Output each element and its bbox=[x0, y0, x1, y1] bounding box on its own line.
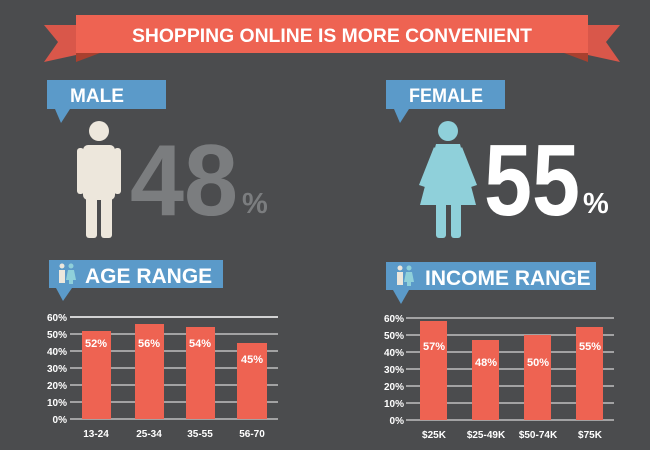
chart: age range: 25-34 bbox=[136, 429, 162, 440]
chart: income range: 30% bbox=[384, 365, 404, 376]
chart: income range: 50% bbox=[527, 357, 549, 369]
chart: income range: 57% bbox=[423, 341, 445, 353]
chart: income range: 40% bbox=[384, 348, 404, 359]
chart: income range: 50% bbox=[384, 331, 404, 342]
male percentage: 48 bbox=[130, 125, 238, 237]
chart: income range: 60% bbox=[384, 314, 404, 325]
title banner bbox=[44, 15, 620, 62]
chart: income range: 20% bbox=[384, 382, 404, 393]
female percentage: 55 bbox=[484, 125, 580, 237]
chart: income range: 48% bbox=[475, 357, 497, 369]
label: female: FEMALE bbox=[409, 86, 483, 107]
male percentage: % bbox=[242, 188, 268, 220]
label: income range bbox=[386, 262, 596, 304]
chart: age range: 0% bbox=[53, 415, 67, 426]
chart: age range: 40% bbox=[47, 347, 67, 358]
chart: age range bbox=[47, 313, 278, 440]
chart: age range: 52% bbox=[85, 338, 107, 350]
label: female bbox=[386, 80, 505, 123]
chart: income range: $50-74K bbox=[519, 430, 558, 441]
label: income range: INCOME RANGE bbox=[425, 267, 591, 290]
label: male: MALE bbox=[70, 86, 124, 107]
label: male bbox=[47, 80, 166, 123]
icon: female figure bbox=[419, 121, 477, 238]
chart: age range: 54% bbox=[189, 338, 211, 350]
title banner: SHOPPING ONLINE IS MORE CONVENIENT bbox=[132, 26, 532, 47]
chart: age range: 35-55 bbox=[187, 429, 213, 440]
chart: age range: 30% bbox=[47, 364, 67, 375]
chart: age range: 20% bbox=[47, 381, 67, 392]
chart: income range: $75K bbox=[578, 430, 603, 441]
chart: age range: 45% bbox=[241, 354, 263, 366]
female percentage: % bbox=[583, 188, 609, 220]
chart: age range: 56-70 bbox=[239, 429, 265, 440]
label: age range: AGE RANGE bbox=[85, 265, 212, 288]
chart: age range: 10% bbox=[47, 398, 67, 409]
chart: income range: 10% bbox=[384, 399, 404, 410]
chart: age range: 60% bbox=[47, 313, 67, 324]
chart: income range: 0% bbox=[390, 416, 404, 427]
chart: income range: $25-49K bbox=[467, 430, 506, 441]
chart: age range: 13-24 bbox=[83, 429, 109, 440]
chart: income range bbox=[384, 314, 614, 441]
chart: income range: $25K bbox=[422, 430, 447, 441]
icon: male figure bbox=[77, 121, 121, 238]
label: age range bbox=[49, 260, 223, 301]
chart: age range: 50% bbox=[47, 330, 67, 341]
chart: age range: 56% bbox=[138, 338, 160, 350]
chart: income range: 55% bbox=[579, 341, 601, 353]
